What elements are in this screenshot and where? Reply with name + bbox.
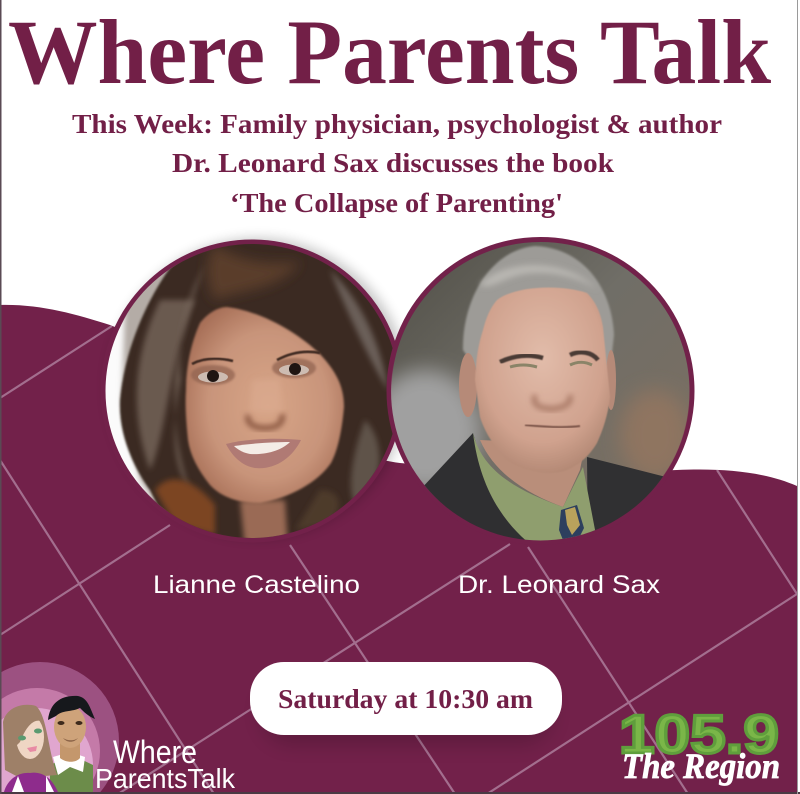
hair xyxy=(463,246,614,372)
mouth xyxy=(525,425,580,427)
subtitle text block: This Week: Family physician, psychologist & author xyxy=(72,109,722,139)
logo: 105.9 The Region: 105.9 xyxy=(619,703,779,765)
portrait: Dr. Leonard Sax xyxy=(370,240,692,548)
nose xyxy=(248,414,282,428)
portrait: Lianne Castelino xyxy=(103,238,420,548)
smile xyxy=(226,439,301,468)
brows and eyes xyxy=(500,356,543,362)
man xyxy=(50,761,93,792)
hair mass xyxy=(118,244,392,538)
left eye xyxy=(198,372,228,382)
logo: 105.9 The Region xyxy=(619,703,780,786)
name: Dr. Leonard Sax: Dr. Leonard Sax xyxy=(458,571,661,599)
name: Lianne Castelino: Lianne Castelino xyxy=(153,571,360,599)
face xyxy=(475,288,610,473)
jacket xyxy=(424,433,528,540)
subtitle text block: ‘The Collapse of Parenting' xyxy=(230,188,563,218)
tie xyxy=(559,505,584,540)
neck xyxy=(480,440,585,507)
nose xyxy=(534,395,570,409)
ears xyxy=(459,353,477,417)
subtitle text block: Dr. Leonard Sax discusses the book xyxy=(172,148,614,178)
photo background xyxy=(118,264,178,511)
right eye xyxy=(279,364,309,376)
logo: 105.9 The Region: The Region xyxy=(622,746,780,786)
face xyxy=(186,307,344,503)
logo: Where Parents Talk: Where xyxy=(113,734,197,770)
woman xyxy=(3,705,57,778)
subtitle text block xyxy=(72,109,722,218)
neck xyxy=(240,500,288,548)
shirt xyxy=(473,433,596,548)
airtime pill: Saturday at 10:30 am xyxy=(278,684,534,714)
eye shadows xyxy=(191,365,235,385)
airtime pill xyxy=(250,662,562,744)
logo: Where Parents Talk xyxy=(0,662,236,794)
title: Where Parents Talk xyxy=(8,1,772,103)
burgundy wave panel xyxy=(0,305,797,794)
logo: Where Parents Talk: ParentsTalk xyxy=(95,763,236,794)
